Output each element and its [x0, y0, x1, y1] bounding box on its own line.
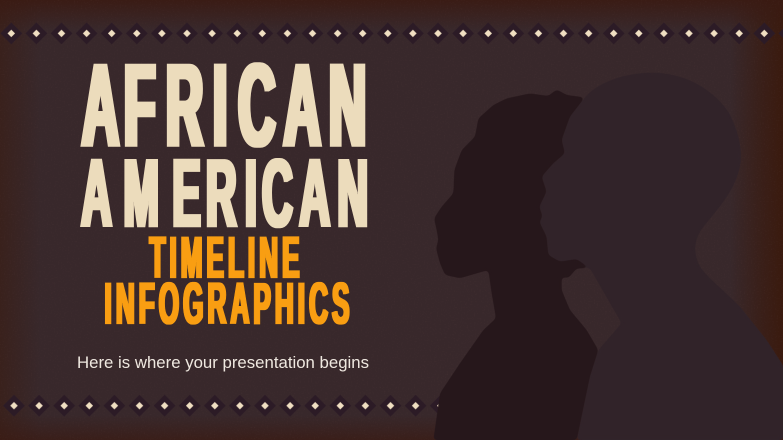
bottom diamond border [0, 393, 440, 418]
top diamond border [0, 21, 783, 46]
silhouette: man [539, 73, 783, 440]
silhouettes [433, 73, 783, 440]
title line: African: AFRICAN [82, 41, 366, 171]
slide: INFOGRAPHICS [104, 272, 354, 337]
silhouette: woman [433, 89, 598, 440]
tagline: Here is where your presentation begins [77, 354, 369, 372]
title line: American: AMERICAN [81, 139, 368, 247]
slide: TIMELINE [150, 226, 304, 291]
